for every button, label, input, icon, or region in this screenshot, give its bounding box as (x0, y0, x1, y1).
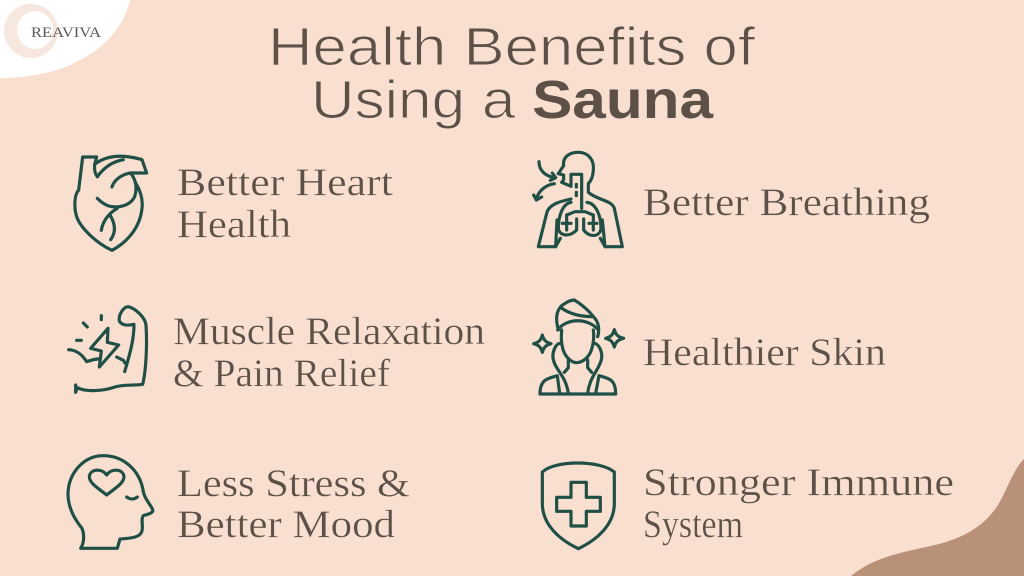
label: stronger immune system (643, 461, 954, 546)
icon: respiratory system (534, 152, 622, 247)
icon: shield with cross (542, 463, 614, 549)
label: better breathing: Better Breathing (643, 181, 930, 224)
label: less stress and better mood: Less Stress & (177, 462, 410, 505)
label: better heart health: Better Heart (177, 161, 393, 204)
label: better heart health (177, 161, 393, 246)
label: stronger immune system: System (643, 503, 743, 546)
logo: white corner blob with wordmark (0, 0, 130, 78)
icon: woman with towel and sparkles (534, 300, 624, 394)
label: muscle relaxation and pain relief: & Pain Relief (173, 352, 390, 395)
icon: heart (75, 156, 147, 250)
label: stronger immune system: Stronger Immune (643, 461, 954, 504)
title: Using a Sauna (311, 70, 714, 130)
label: muscle relaxation and pain relief: Muscle Relaxation (173, 310, 485, 353)
icon: head with heart (68, 456, 153, 548)
icon: flexed arm with lightning (69, 307, 147, 392)
label: better heart health: Health (177, 203, 291, 246)
label: less stress and better mood (177, 462, 410, 546)
label: less stress and better mood: Better Mood (177, 503, 396, 546)
title (268, 17, 756, 130)
label: muscle relaxation and pain relief (173, 310, 485, 395)
title: Health Benefits of (268, 17, 756, 77)
decorative corner blob (851, 459, 1024, 576)
logo: white corner blob with wordmark: REAVIVA (31, 25, 102, 41)
label: healthier skin: Healthier Skin (643, 331, 886, 374)
